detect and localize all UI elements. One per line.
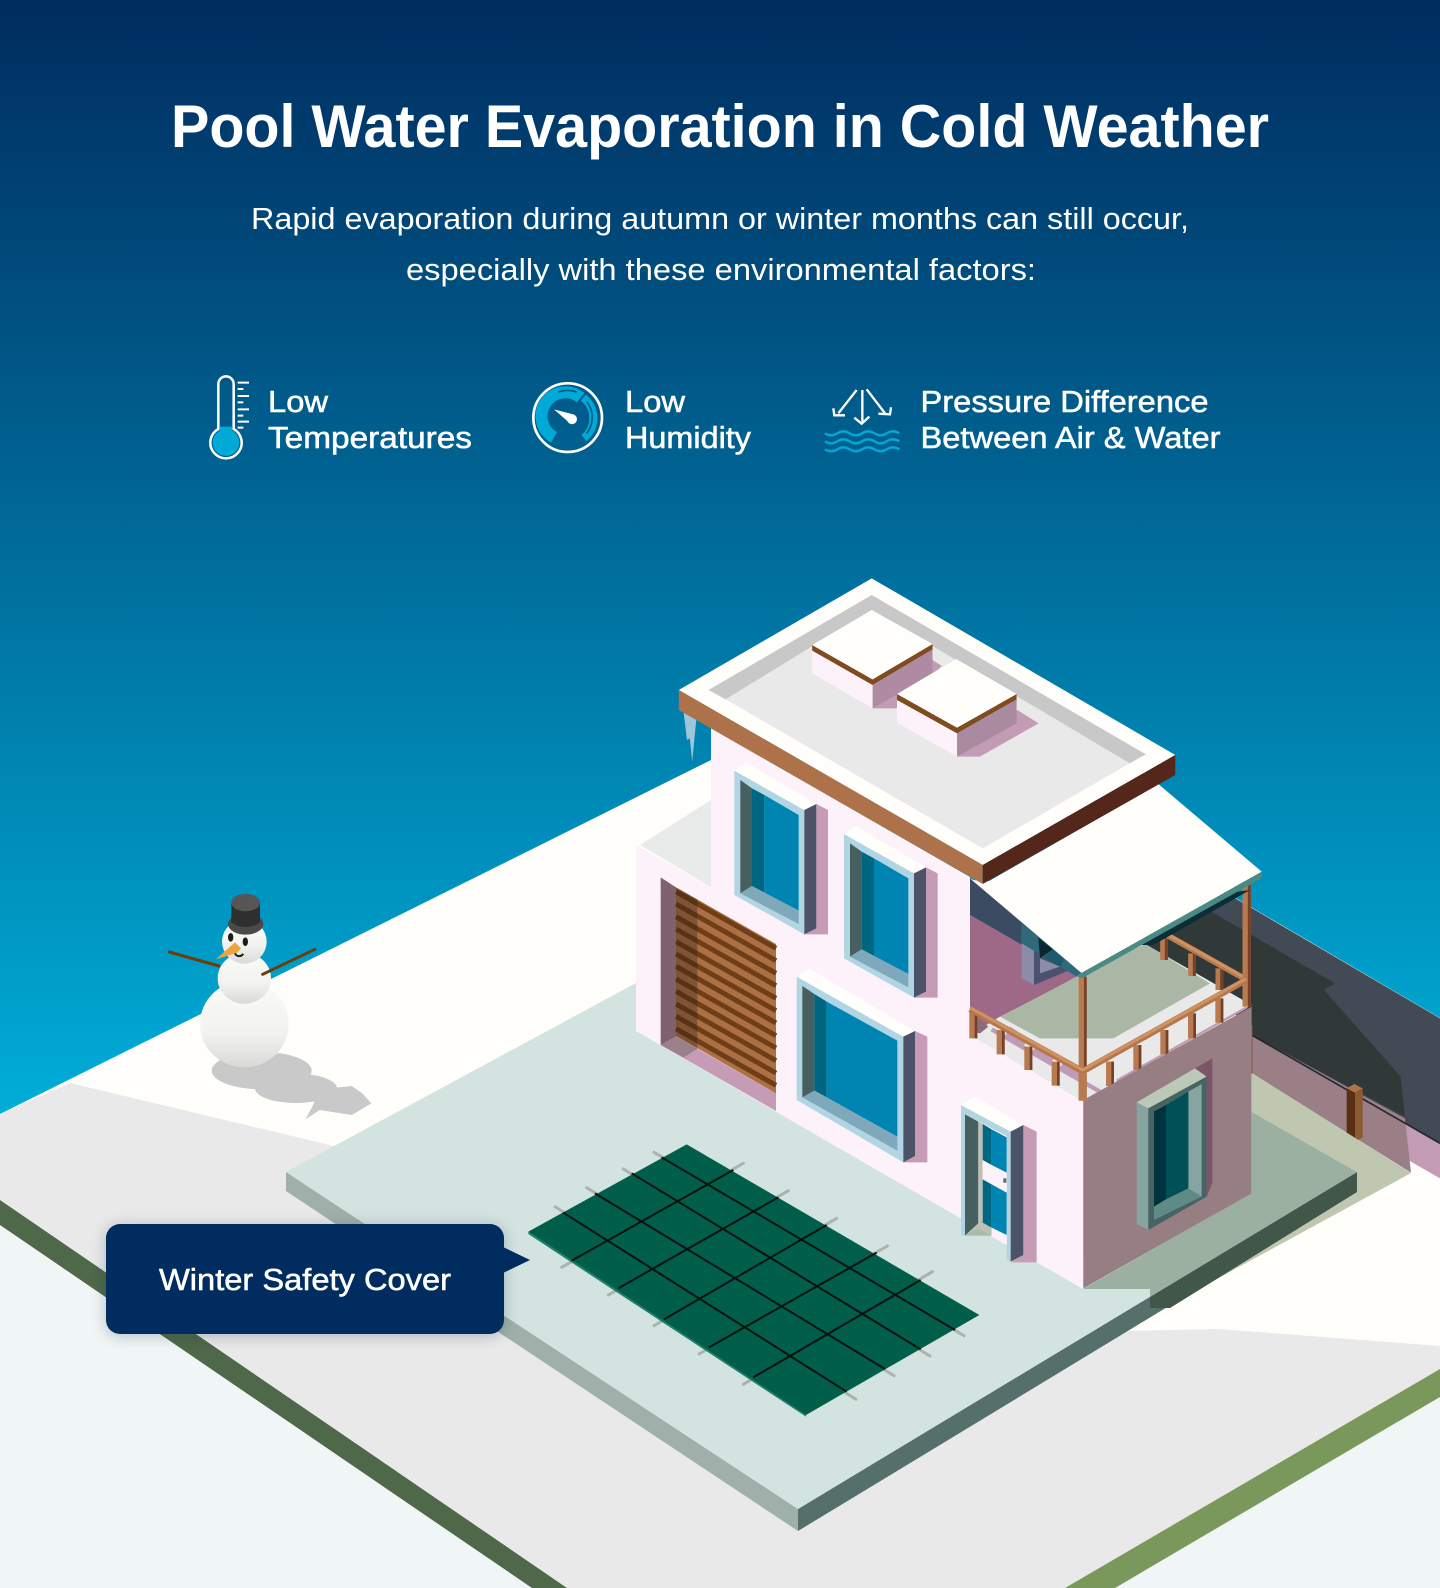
facade xyxy=(636,728,1083,1289)
roof fascia right xyxy=(983,755,1175,884)
subtitle text: especially with these environmental factors: xyxy=(406,252,1036,287)
cover grid xyxy=(563,1157,955,1392)
cover anchor straps xyxy=(555,1152,964,1399)
snowman shadow xyxy=(212,1052,371,1119)
label: low humidity: Humidity xyxy=(625,420,752,455)
callout label: Winter Safety Cover xyxy=(159,1262,451,1297)
parapet inner xyxy=(709,595,1146,763)
window: upper right xyxy=(844,826,938,998)
factor: pressure difference xyxy=(825,384,1220,455)
tall post front xyxy=(1083,977,1085,1070)
front railing posts xyxy=(973,998,1222,1101)
label: low humidity: Low xyxy=(625,384,686,419)
callout shadow xyxy=(106,1226,504,1336)
recessed wall mauve xyxy=(970,915,1077,1035)
window: upper left xyxy=(734,763,828,934)
plate: left side xyxy=(286,1172,798,1531)
window: large ground floor xyxy=(797,968,927,1162)
right window xyxy=(1137,1068,1207,1230)
balcony xyxy=(970,878,1252,1101)
plate: house shadow xyxy=(1083,1112,1357,1297)
hedge strip right xyxy=(1065,1369,1440,1588)
right window recess xyxy=(1195,1058,1212,1197)
plate: right side shaded xyxy=(1150,1172,1357,1308)
louvre wall xyxy=(661,877,776,1111)
plate: right side xyxy=(798,1172,1357,1531)
wall corner strip xyxy=(1249,1025,1254,1074)
roof deck xyxy=(726,610,1130,848)
cover surface xyxy=(528,1144,979,1415)
factor: low temperatures xyxy=(210,376,472,458)
fence post xyxy=(1347,1084,1363,1142)
snowman hat xyxy=(228,894,263,935)
right wing wall xyxy=(1083,1007,1252,1288)
label: low temperatures: Low xyxy=(268,384,329,419)
front corner post over wall xyxy=(1071,1073,1095,1101)
right wing and door xyxy=(961,784,1262,1288)
hedge strip left xyxy=(0,1200,567,1588)
canopy underside dark band xyxy=(1135,890,1250,945)
front lawn left xyxy=(0,1225,532,1588)
callout box xyxy=(106,1224,504,1334)
label: low humidity xyxy=(625,384,752,455)
plate: top xyxy=(286,900,1357,1509)
ground shadow of house xyxy=(1150,1073,1411,1310)
callout arrow xyxy=(503,1247,530,1273)
concrete plate xyxy=(286,900,1357,1531)
wall: lower pink band xyxy=(1252,1035,1440,1178)
snowman body xyxy=(200,920,289,1067)
label: pressure difference xyxy=(920,384,1220,455)
balcony floor light xyxy=(970,944,1252,1101)
balcony floor shaded xyxy=(1000,944,1210,1038)
grey driveway strip xyxy=(0,1083,1440,1588)
tall post back xyxy=(1247,883,1249,1007)
house xyxy=(636,578,1262,1289)
front lawn right xyxy=(1115,1397,1440,1588)
roof box 2 xyxy=(897,659,1039,757)
wall: shaded lower band xyxy=(1252,1035,1411,1173)
label: low temperatures: Temperatures xyxy=(268,420,472,455)
wall: cast shadow xyxy=(1137,910,1405,1117)
icon: gauge xyxy=(533,383,602,452)
roof box 1 xyxy=(812,610,942,708)
pool safety cover xyxy=(528,1144,979,1417)
title: Pool Water Evaporation in Cold Weather xyxy=(171,93,1269,160)
front railing rails xyxy=(970,979,1246,1071)
boundary wall with fence post xyxy=(1137,893,1440,1178)
icon: pressure arrows over water xyxy=(825,389,899,451)
snowy ground xyxy=(0,760,1440,1588)
label: pressure difference: Pressure Difference xyxy=(920,384,1208,419)
label: low temperatures xyxy=(268,384,472,455)
recessed wall shadow xyxy=(970,878,1082,977)
factor: low humidity xyxy=(533,383,752,455)
line: wall base xyxy=(1252,1035,1440,1143)
snowman face xyxy=(216,933,248,959)
door xyxy=(961,1097,1037,1262)
snowman xyxy=(169,894,371,1119)
cover edge xyxy=(528,1232,806,1417)
terrace floor xyxy=(640,800,711,887)
upper side window in recess xyxy=(1022,923,1082,985)
subtitle text: Rapid evaporation during autumn or winter months can still occur, xyxy=(251,201,1189,236)
canopy xyxy=(970,784,1262,978)
back railing xyxy=(1164,932,1244,990)
callout: winter safety cover xyxy=(106,1224,530,1336)
snowman arms xyxy=(169,949,315,974)
roof top xyxy=(679,578,1175,865)
wall: dark upper xyxy=(1137,893,1440,1143)
roof fascia left xyxy=(679,690,983,884)
label: pressure difference: Between Air & Water xyxy=(920,420,1220,455)
railing shadows on floor xyxy=(977,1007,1247,1093)
roof xyxy=(679,578,1175,884)
subtitle text xyxy=(251,201,1189,287)
icon: thermometer xyxy=(210,376,249,458)
icicle xyxy=(684,713,696,762)
